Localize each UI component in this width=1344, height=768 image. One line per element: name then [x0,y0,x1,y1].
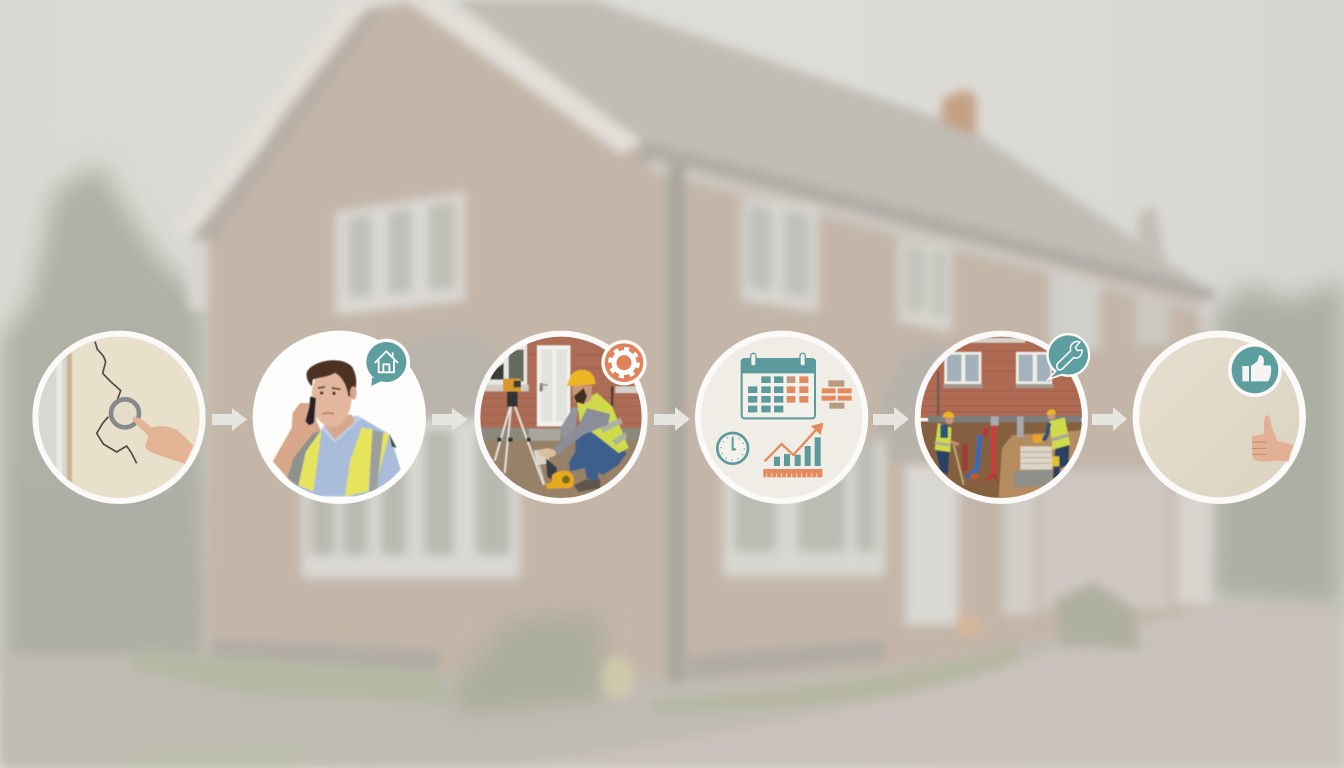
plinth [212,640,885,680]
road [500,605,1344,768]
house walls [208,0,1210,680]
small window right and pipe [615,386,640,393]
left worker [935,412,964,485]
tripod [495,403,544,485]
barge boards [176,0,372,238]
fascia [640,140,1216,302]
blue pipe [967,435,980,478]
brick facade [920,336,1082,419]
window [485,344,528,390]
right worker [1044,409,1070,478]
pointing hand [133,417,193,464]
step [529,429,560,441]
ear [350,386,357,400]
arrow 2 [432,408,468,431]
tape measure [545,471,574,489]
arrow 4 [873,407,909,431]
vest: yellow panels [298,430,322,491]
head [312,366,352,427]
arrow 3 [654,407,690,431]
block stack [1020,446,1052,470]
magnifier ring [111,399,139,427]
worker jeans [569,431,627,481]
hand [539,448,556,458]
eyes and mouth [318,387,341,389]
head and beard [572,385,592,405]
roof [455,0,1216,295]
shrubs [450,612,605,715]
step 5: underpinning works [912,328,1092,505]
orange tool [1033,435,1042,443]
phone [305,396,316,425]
paper and rod [534,449,549,465]
door [537,345,570,426]
icon: growth chart [763,423,823,477]
icon: calendar [742,353,815,418]
step 2: man on the phone [253,331,426,504]
neck [325,415,355,440]
downpipe [937,371,939,416]
icon: thumbs-up badge [1228,343,1282,397]
arrow 1 [212,408,247,431]
wall [70,336,200,498]
thumbs-up hand [1252,415,1293,462]
upper windows [336,192,465,315]
porch canopies [405,328,495,440]
hi-vis vest [577,393,629,453]
windows [944,352,981,384]
step 4: planning icons [695,331,868,504]
step 6: repaired wall with thumbs up [1133,331,1306,504]
sleeve [555,408,610,455]
collar [322,415,362,443]
step 3: surveyor with tripod [472,328,652,505]
front doors and panels [905,465,959,625]
brick wall [480,336,642,429]
lawn [130,650,450,705]
dark red pipe [962,443,968,471]
arrow 5 [1092,407,1127,431]
ground device [546,458,557,482]
step 1: wall crack being inspected [32,330,206,504]
door frame [38,356,66,478]
hard hat [567,370,596,386]
vest: grey strips [287,431,320,486]
concrete slab [1014,469,1052,487]
icon: clock [717,433,748,464]
red pipe [991,423,996,475]
concrete beam [928,416,1081,422]
shirt [290,418,401,496]
icon: gear badge [601,340,647,385]
lower windows [302,420,520,578]
icon: wrench bubble [1046,333,1090,379]
boot [574,480,600,492]
back arm [559,406,578,440]
level instrument [503,379,521,391]
ground [0,600,1344,768]
ground [484,439,638,498]
icon: house speech bubble [363,339,410,386]
chimney [942,90,976,136]
crack [95,342,137,463]
trench [920,420,1082,498]
hair [307,360,356,396]
arm holding phone [273,403,322,483]
icon: bricks [822,380,852,409]
drainpipe [668,165,685,683]
